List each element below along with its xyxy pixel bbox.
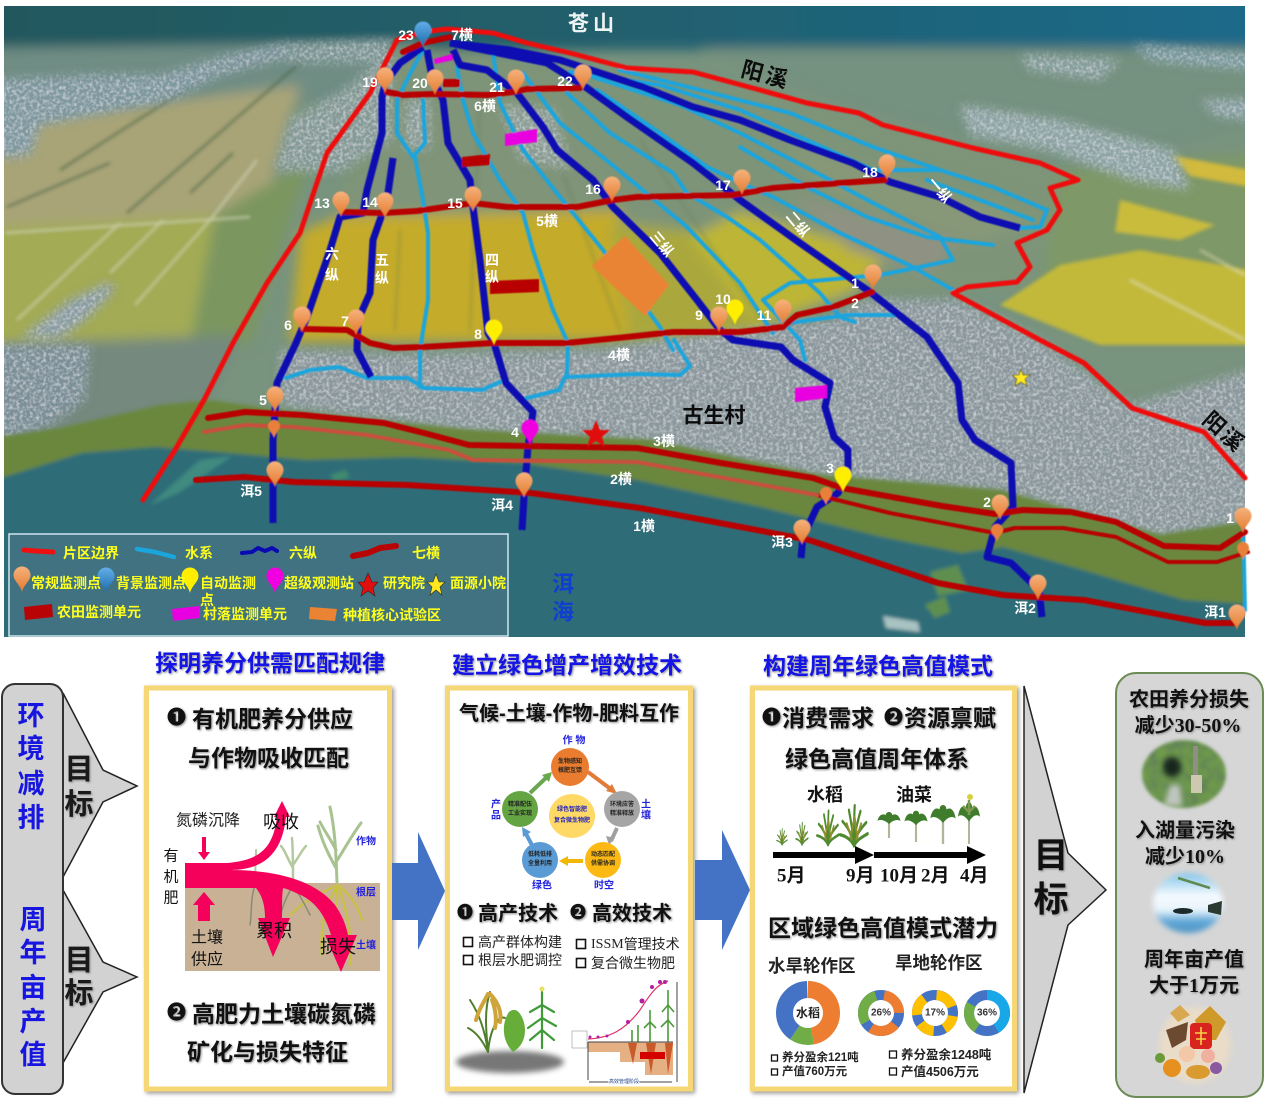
large goal arrow: 目: [1033, 836, 1069, 876]
text: annual value per mu: 大于1万元: [1149, 974, 1239, 997]
map labels: 10: [715, 291, 731, 307]
text: paddy-upland results: [772, 1050, 859, 1078]
text: goal labels: 目: [64, 945, 94, 977]
map overlay lines and markers: [143, 22, 1252, 630]
map labels: 洱5: [240, 483, 262, 499]
text: environmental emission reduction: 境: [18, 734, 44, 764]
illustration: harvest cartoon: [1155, 1005, 1231, 1083]
nutrient flow diagram: 作物: [356, 834, 376, 848]
text: region names: [768, 953, 982, 976]
text: region names: 旱地轮作区: [895, 953, 982, 973]
legend: 片区边界: [63, 545, 119, 561]
nutrient flow diagram: 供应: [191, 950, 223, 968]
legend: 面源小院: [450, 575, 506, 591]
text: demand and resources: 绿色高值周年体系: [785, 746, 969, 772]
panel: nutrient supply-demand: [146, 650, 390, 1089]
cycle diagram: 产: [491, 798, 501, 810]
crop rotation timeline: 2月: [921, 866, 950, 886]
text: demand and resources: 资源禀赋: [904, 705, 996, 731]
text: goal labels: 标: [64, 788, 94, 821]
map labels: 13: [314, 195, 330, 211]
crop rotation timeline: 油菜: [896, 785, 932, 805]
crop rotation timeline: 水稻: [807, 785, 843, 805]
text: demand and resources: [762, 705, 996, 772]
cycle diagram: 环境应答: [610, 800, 634, 808]
map labels: 1: [1226, 510, 1234, 526]
map labels: 7: [341, 313, 349, 329]
text: goal labels: [64, 754, 94, 1010]
text: technology checklist: 高产群体构建: [478, 934, 562, 950]
text: annual value per mu: 周: [20, 905, 46, 935]
map labels: 8: [474, 326, 482, 342]
cycle diagram: 土: [641, 798, 651, 810]
cycle diagram: 全量利用: [528, 859, 552, 867]
map labels: 4: [511, 424, 519, 440]
left goal pill with chevrons: [2, 684, 137, 1094]
arrow: panel 2 to panel 3: [695, 830, 750, 950]
text: demand and resources: 消费需求: [782, 705, 874, 731]
legend: 种植核心试验区: [343, 607, 441, 623]
cycle diagram: 复合微生物肥: [554, 816, 590, 824]
large goal arrow: 标: [1033, 880, 1069, 920]
legend pins and symbols: [14, 566, 445, 621]
villages: [0, 40, 1250, 535]
map labels: 洱2: [1014, 600, 1036, 616]
map labels: 六: [325, 246, 339, 262]
nutrient flow diagram: 肥: [163, 890, 179, 906]
legend: [9, 534, 508, 636]
map labels: 洱: [552, 572, 574, 596]
cycle diagram: 绿色智能肥: [557, 805, 587, 813]
text: technology checklist: ISSM管理技术: [591, 936, 680, 952]
map labels: 11: [757, 307, 772, 323]
text: annual value per mu: 值: [20, 1040, 46, 1070]
illustration: yield curve chart: 高效管理阶段: [609, 1078, 639, 1085]
crop rotation timeline: [773, 785, 989, 886]
text: point 1: 有机肥养分供应: [192, 706, 353, 732]
text: point 2: ❷: [167, 1002, 186, 1024]
text: annual value per mu: 亩: [20, 973, 46, 1003]
cycle diagram: 精准配伍: [508, 800, 532, 808]
legend line samples: [24, 546, 396, 557]
map labels: 3: [826, 460, 834, 476]
map labels: 洱3: [771, 534, 793, 550]
text: technology checklist: 根层水肥调控: [478, 952, 562, 968]
legend: 研究院: [383, 575, 425, 591]
legend: 六纵: [289, 545, 317, 561]
map labels: 21: [489, 79, 505, 95]
cycle diagram: 供需协调: [591, 859, 615, 867]
nutrient flow diagram: 吸收: [263, 812, 299, 832]
map labels: 三纵: [647, 228, 677, 260]
text: technology headings: ❷: [570, 904, 586, 922]
map labels: 洱4: [491, 497, 513, 513]
text: lake inflow pollution: [1135, 819, 1235, 868]
nutrient flow diagram: 氮磷沉降: [176, 812, 240, 830]
map labels: [240, 12, 1250, 624]
map labels: 海: [552, 600, 574, 624]
map labels: 18: [862, 164, 878, 180]
cycle diagram: 生物感知: [558, 757, 582, 765]
panel: annual green high-value model: [752, 653, 1014, 1089]
cycle arrows: [522, 772, 617, 866]
text: environmental emission reduction: [18, 701, 44, 833]
text: demand and resources: ❷: [884, 706, 903, 728]
text: regional potential: 区域绿色高值模式潜力: [768, 915, 998, 941]
panel: aerial map of the monitoring area: [0, 0, 1268, 650]
map labels: 二纵: [783, 208, 813, 240]
map labels: 2横: [610, 471, 632, 487]
cycle diagram: 作 物: [563, 734, 585, 746]
map photo background: [0, 0, 1268, 650]
text: point 1: 与作物吸收匹配: [188, 745, 349, 771]
nutrient flow diagram: 土壤: [356, 938, 376, 952]
text: annual value per mu: 周年亩产值: [1144, 948, 1244, 971]
large goal arrow: [1024, 686, 1106, 1093]
legend: 农田监测单元: [57, 604, 141, 620]
crop rotation timeline: 5月: [777, 866, 806, 886]
map labels: 5横: [536, 213, 558, 229]
text: goal labels: 标: [64, 977, 94, 1010]
map labels: 14: [362, 194, 378, 210]
text: annual value per mu: [1144, 948, 1244, 997]
legend: 自动监测: [200, 575, 256, 591]
nutrient flow diagram: [163, 801, 380, 972]
crops and roots: [250, 807, 362, 965]
water system lines: [286, 50, 1245, 610]
map labels: 纵: [375, 270, 389, 286]
panel frame: [146, 688, 390, 1089]
text: farmland nutrient loss: 农田养分损失: [1129, 687, 1249, 711]
panel: green yield technology: [448, 652, 690, 1089]
nutrient flow diagram: 损失: [320, 937, 356, 957]
map labels: 9: [695, 307, 703, 323]
donut: upland 17%: 17%: [925, 1008, 945, 1018]
map labels: 纵: [325, 267, 339, 283]
map labels: 阳溪: [739, 56, 793, 94]
donut: upland 26%: 26%: [871, 1008, 891, 1018]
text: point 2: 矿化与损失特征: [187, 1039, 348, 1065]
chevron: goal 1: [63, 693, 137, 877]
text: technology checklist: 复合微生物肥: [591, 955, 675, 971]
cycle diagram: 低耗低排: [528, 850, 552, 858]
photo: monitoring weir: [1142, 740, 1226, 808]
map labels: 1: [851, 275, 859, 291]
map labels: 洱1: [1204, 604, 1226, 620]
text: region names: 水旱轮作区: [768, 956, 856, 976]
legend: 背景监测点: [116, 575, 186, 591]
illustration: yield curve chart: [572, 980, 677, 1085]
map labels: 6: [284, 317, 292, 333]
map labels: 四: [485, 252, 499, 268]
text: goal labels: 目: [64, 754, 94, 786]
six longitudinal channels (dark blue): [273, 43, 1042, 617]
text: technology checklist: [464, 934, 680, 971]
pill: [2, 684, 63, 1094]
cycle diagram: 壤: [641, 808, 651, 822]
text: point 2: [167, 1001, 376, 1065]
text: upland results: [890, 1047, 992, 1079]
heading: 构建周年绿色高值模式: [763, 653, 993, 679]
cycle diagram: 绿色: [532, 878, 552, 892]
nutrient flow diagram: 累积: [256, 921, 292, 941]
legend: 点: [200, 592, 214, 608]
cycle diagram: 品: [491, 810, 501, 822]
donut: paddy-upland: 水稻: [796, 1005, 820, 1020]
chevron: goal 2: [63, 890, 137, 1063]
nutrient flow diagram: 机: [163, 868, 179, 886]
heading: 建立绿色增产增效技术: [452, 652, 682, 678]
map labels: 2: [851, 295, 859, 311]
donut: upland 26%: [863, 995, 899, 1031]
text: upland results: 养分盈余1248吨: [901, 1047, 992, 1062]
map labels: 20: [412, 75, 428, 91]
crop rotation timeline: 10月: [880, 866, 918, 886]
text: technology headings: ❶: [457, 904, 473, 922]
map labels: 19: [362, 74, 378, 90]
text: point 2: 高肥力土壤碳氮磷: [192, 1001, 376, 1027]
legend: 超级观测站: [284, 575, 354, 591]
nutrient flow diagram: 有: [163, 848, 179, 864]
arrow: panel 1 to panel 2: [392, 832, 445, 950]
text: technology headings: 高效技术: [592, 901, 672, 925]
text: farmland nutrient loss: 减少30-50%: [1135, 714, 1241, 737]
text: technology headings: 高产技术: [478, 901, 558, 925]
map labels: 22: [557, 73, 573, 89]
text: environmental emission reduction: 减: [18, 769, 44, 799]
text: upland results: 产值4506万元: [901, 1064, 979, 1079]
map labels: 3横: [653, 433, 675, 449]
boundary line (red): [143, 29, 1245, 500]
cycle diagram: 动态匹配: [591, 850, 615, 858]
map labels: 2: [983, 494, 991, 510]
map labels: 5: [259, 392, 267, 408]
text: point 1: ❶: [167, 706, 186, 728]
illustration: crops on soil: [456, 986, 564, 1073]
nutrient flow diagram: 根层: [356, 886, 376, 898]
map labels: 五: [375, 252, 389, 268]
legend: 水系: [185, 545, 213, 561]
legend: 常规监测点: [31, 575, 101, 591]
text: paddy-upland results: 养分盈余121吨: [782, 1050, 859, 1064]
seven transverse channels (dark red): [196, 37, 1248, 623]
core experiment plot: [592, 236, 669, 316]
map labels: 15: [447, 195, 463, 211]
stars: research institute and source courtyard: [582, 369, 1030, 447]
photo: lake view: [1153, 873, 1223, 933]
map labels: 7横: [451, 27, 473, 43]
map labels: 纵: [485, 269, 499, 285]
text: environmental emission reduction: 排: [18, 803, 44, 833]
text: paddy-upland results: 产值760万元: [782, 1064, 848, 1078]
cycle diagram: 精准释放: [610, 809, 634, 817]
map labels: 1横: [633, 518, 655, 534]
monitoring point pins: [266, 22, 1252, 630]
donut: upland 36%: [969, 995, 1005, 1031]
panel: outcomes: [1116, 673, 1263, 1097]
flow arrows: [185, 801, 357, 972]
text: technology headings: [457, 901, 672, 925]
text: annual value per mu: [20, 905, 46, 1070]
text: demand and resources: ❶: [762, 706, 781, 728]
panel frame: [448, 688, 690, 1089]
text: annual value per mu: 年: [20, 938, 46, 968]
crop rotation timeline: 4月: [960, 866, 989, 886]
map labels: 6横: [474, 98, 496, 114]
map labels: 17: [715, 177, 731, 193]
text: farmland nutrient loss: [1129, 687, 1249, 737]
crop rotation timeline: 9月: [846, 866, 875, 886]
map labels: 23: [398, 27, 414, 43]
cycle diagram: 时空: [594, 878, 614, 892]
heading: 探明养分供需匹配规律: [155, 650, 385, 676]
donut: paddy-upland: [784, 990, 832, 1036]
donut: upland 36%: 36%: [977, 1008, 997, 1018]
cycle diagram: [491, 734, 651, 892]
text: interaction heading: 气候-土壤-作物-肥料互作: [459, 701, 679, 725]
map labels: 一纵: [925, 174, 955, 206]
map labels: 苍山: [568, 12, 618, 36]
panel frame: [752, 688, 1014, 1089]
cycle diagram: 工业实现: [508, 809, 532, 817]
legend: 七横: [412, 545, 440, 561]
monitoring units: [434, 54, 827, 402]
text: environmental emission reduction: 环: [18, 701, 44, 731]
cycle diagram: 根肥互馈: [558, 766, 582, 774]
text: lake inflow pollution: 减少10%: [1145, 845, 1225, 868]
legend: 村落监测单元: [203, 606, 287, 622]
text: lake inflow pollution: 入湖量污染: [1135, 819, 1235, 842]
map labels: 16: [585, 181, 601, 197]
map labels: 古生村: [682, 404, 746, 428]
text: annual value per mu: 产: [20, 1007, 46, 1037]
nutrient flow diagram: 土壤: [191, 928, 223, 946]
text: point 1: [167, 706, 353, 771]
donut: upland 17%: [917, 995, 953, 1031]
map labels: 4横: [608, 347, 630, 363]
map labels: 阳溪: [1198, 407, 1250, 457]
